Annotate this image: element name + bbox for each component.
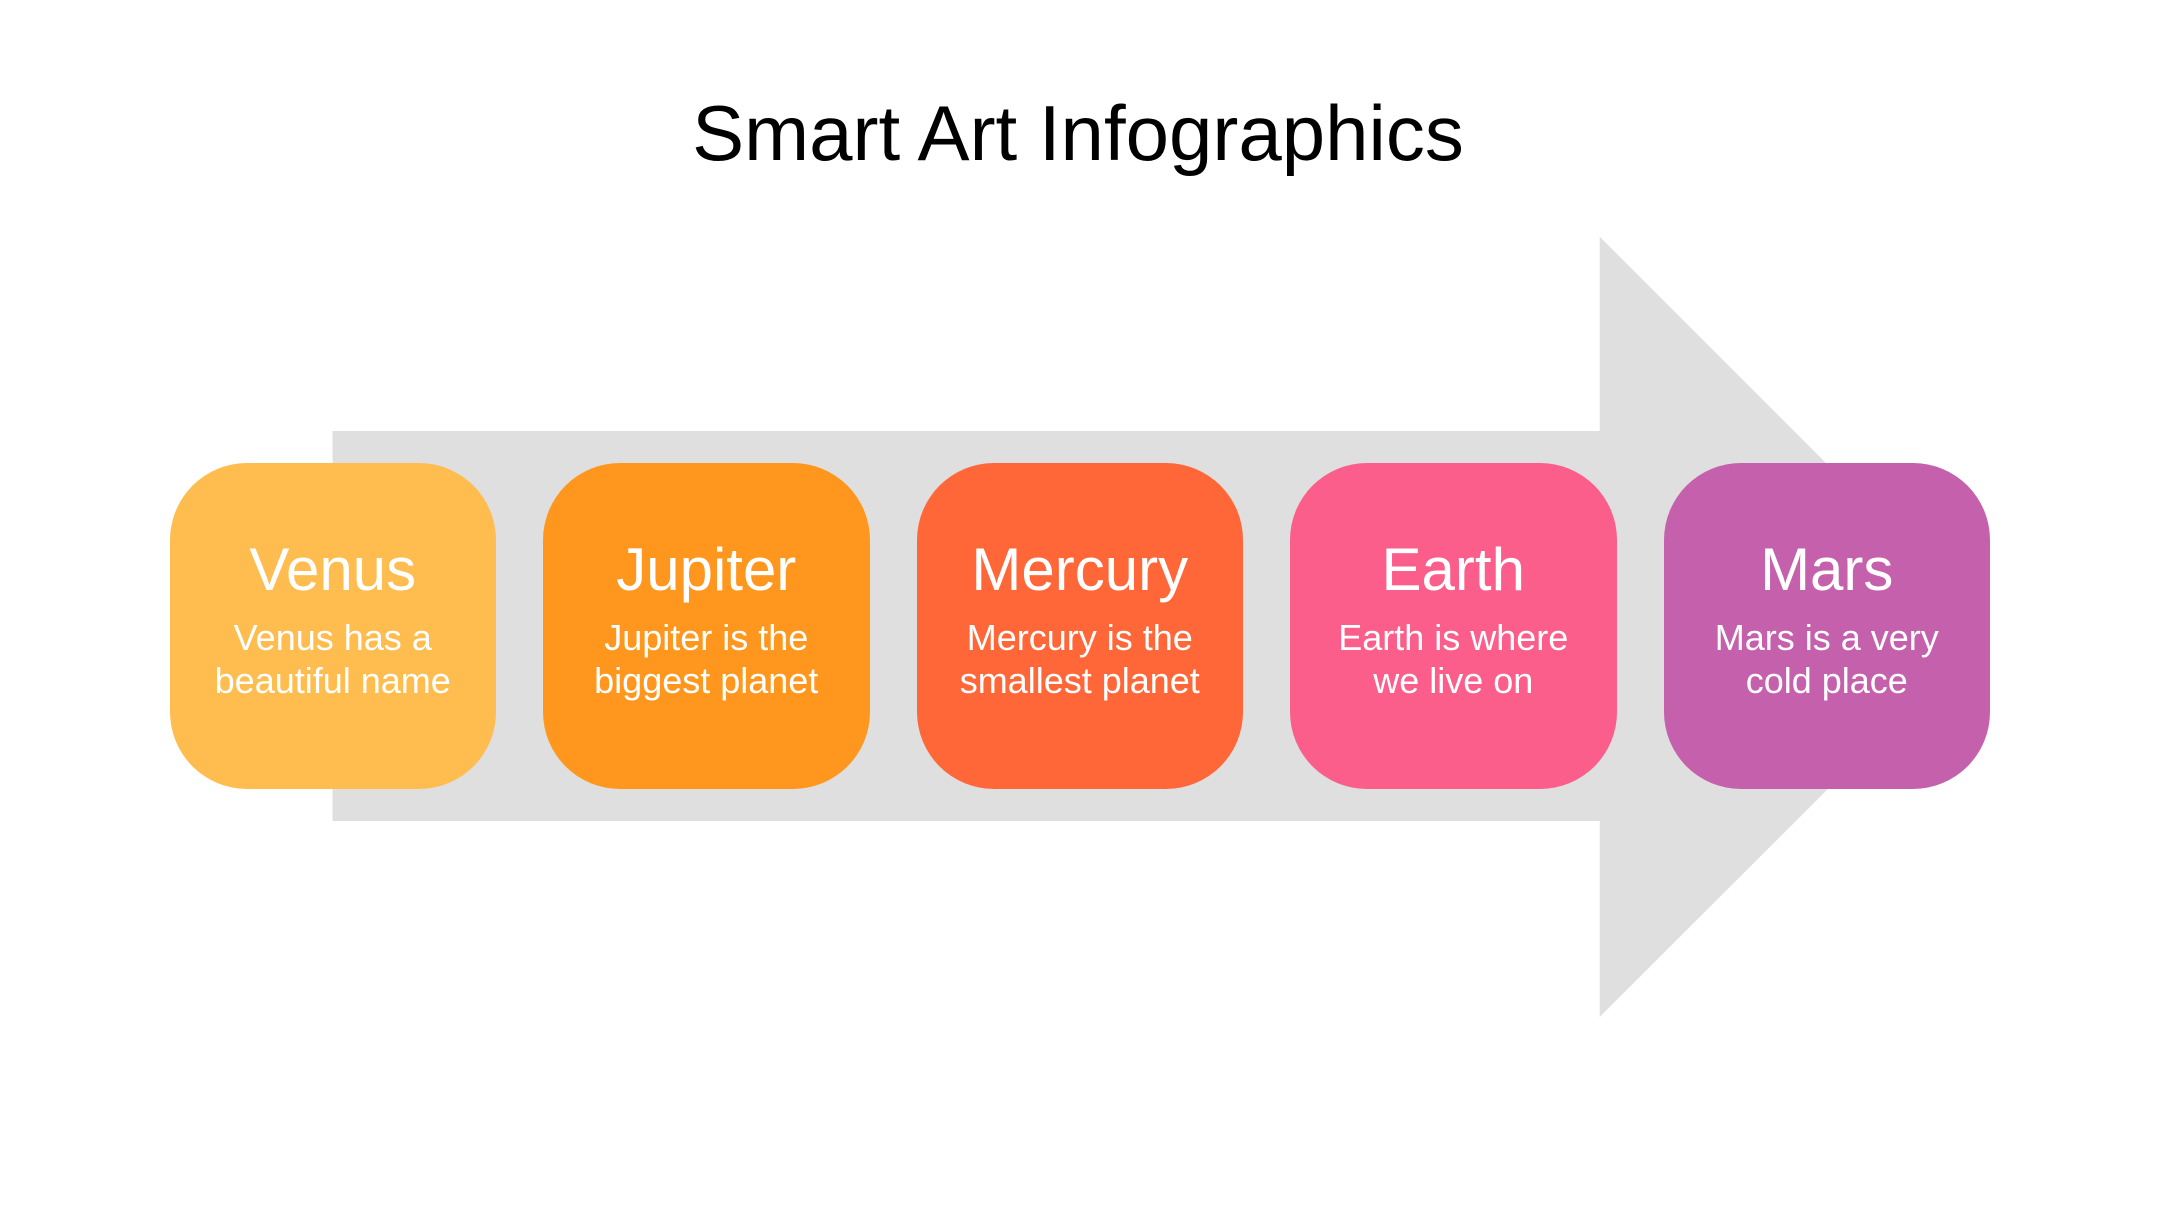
text: Earth description: Earth is where [1338,617,1568,658]
heading: Mars: Mars [1760,536,1893,603]
text: Jupiter description [594,617,818,701]
card: Mercury [916,463,1243,789]
text: Mercury description: Mercury is the [967,617,1193,658]
title: Smart Art Infographics [692,88,1464,176]
card: Mars [1664,463,1990,789]
card: Earth [1290,463,1616,789]
heading: Earth: Earth [1382,536,1525,603]
text: Jupiter description: Jupiter is the [604,617,808,658]
text: Earth description: we live on [1373,660,1533,701]
text: Mercury description: smallest planet [960,660,1200,701]
text: Mars description: Mars is a very [1715,617,1939,658]
text: Mars description: cold place [1746,660,1908,701]
text: Venus description [215,617,451,701]
text: Mercury description [960,617,1200,701]
text: Mars description [1715,617,1939,701]
heading: Venus: Venus [249,536,416,603]
text: Earth description [1338,617,1568,701]
text: Jupiter description: biggest planet [594,660,818,701]
heading: Mercury: Mercury [971,536,1188,603]
card: Jupiter [543,463,870,789]
card: Venus [170,463,496,789]
text: Venus description: beautiful name [215,660,451,701]
text: Venus description: Venus has a [234,617,432,658]
heading: Jupiter: Jupiter [616,536,796,603]
